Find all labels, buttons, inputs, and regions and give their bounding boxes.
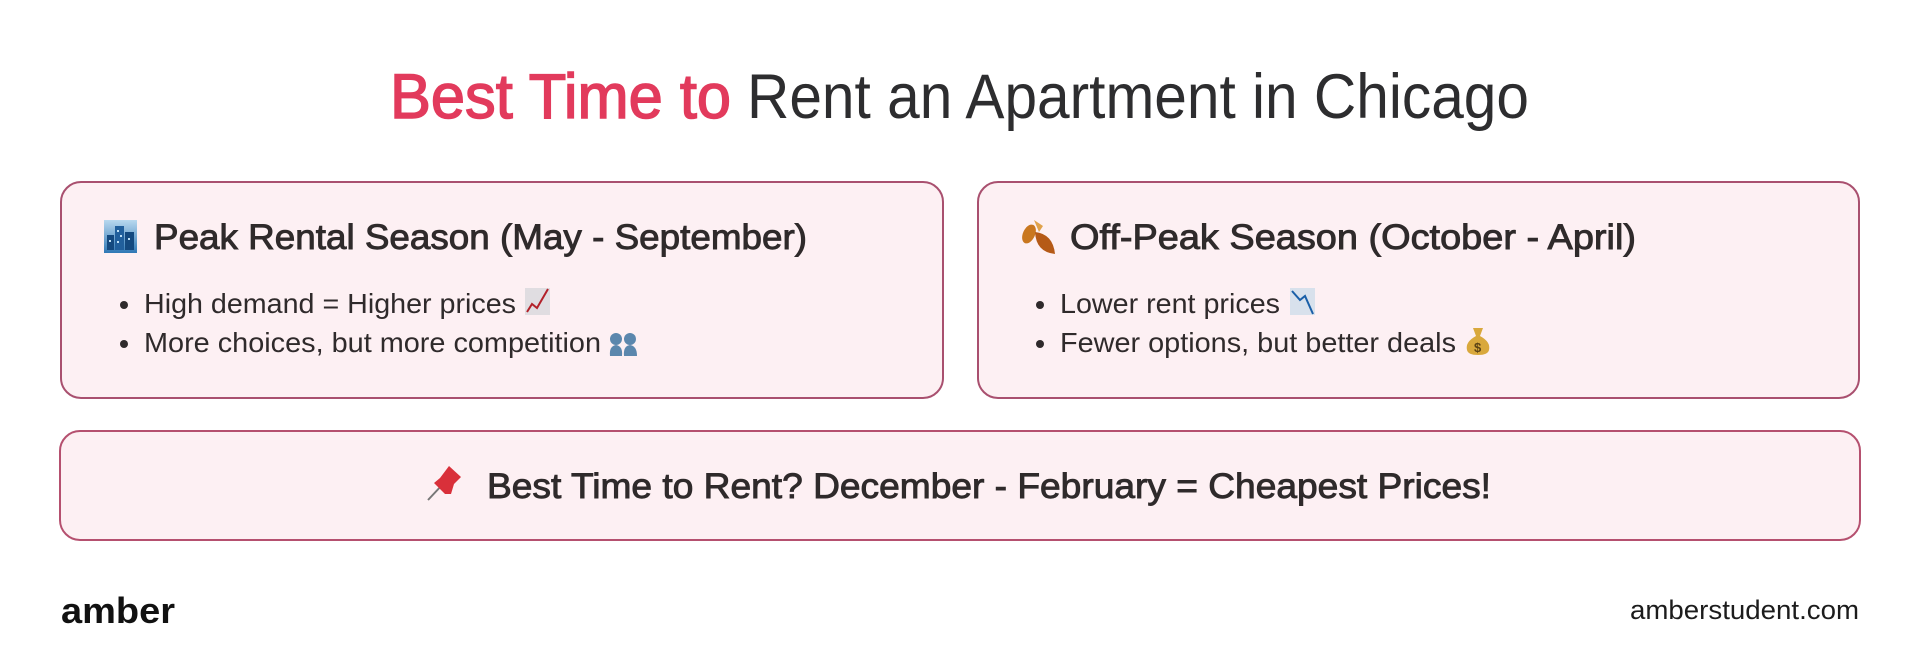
title: Rent an Apartment in Chicago [747, 62, 1529, 132]
icon: chart rising [525, 288, 550, 315]
icon: people silhouettes [610, 333, 637, 356]
icon: pushpin [428, 466, 461, 500]
bullet list: off-peak season: Fewer options, but better deals [1060, 327, 1456, 358]
bullet list: off-peak season: Lower rent prices [1060, 288, 1280, 319]
heading: off-peak season: Off-Peak Season (October - April) [1070, 218, 1636, 257]
bullet list: peak season: High demand = Higher prices [144, 288, 516, 319]
icon: fallen leaves [1019, 220, 1055, 254]
callout text: Best Time to Rent? December - February = Cheapest Prices! [487, 467, 1491, 506]
icon: cityscape [104, 220, 137, 253]
icon: chart falling [1290, 288, 1315, 315]
bullet list: peak season: More choices, but more competition [144, 327, 601, 358]
panel: off-peak season [978, 182, 1859, 398]
bullet list: off-peak season [1036, 288, 1456, 358]
bullet list: peak season [120, 288, 601, 358]
website url: amberstudent.com [1630, 595, 1859, 625]
title: Best Time to [390, 62, 731, 132]
panel: peak rental season [61, 182, 943, 398]
heading: peak season: Peak Rental Season (May - September) [154, 218, 807, 257]
title [390, 62, 1529, 132]
logo: amber: amber [61, 590, 175, 631]
icon: money bag: $ [1474, 340, 1482, 355]
panel: best time callout [60, 431, 1860, 540]
icon: money bag [1467, 328, 1489, 355]
